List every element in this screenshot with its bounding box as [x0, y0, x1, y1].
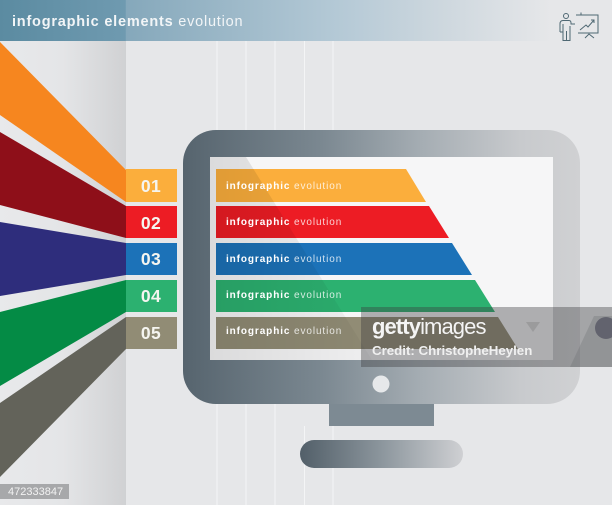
left side panel: [0, 41, 126, 505]
screen glare: [210, 157, 372, 360]
label 05: 05: [141, 323, 161, 343]
bar 4: [216, 280, 495, 312]
number labels: [126, 169, 177, 349]
bar 1: [216, 169, 426, 202]
caption 2: infographic evolution: [226, 217, 342, 228]
power button: [372, 376, 390, 392]
image id tag: [0, 484, 69, 499]
base: [300, 440, 463, 468]
caption 5: infographic evolution: [226, 326, 342, 337]
label 01: 01: [141, 176, 161, 196]
label 03: 03: [141, 249, 161, 269]
label 03: [126, 243, 177, 275]
icon: presenter with chart: [560, 12, 598, 40]
bar 5: [216, 317, 518, 349]
caption 1: infographic evolution: [226, 181, 342, 192]
label 05: [126, 317, 177, 349]
bar captions: [226, 181, 342, 337]
bar 3: [216, 243, 472, 275]
label 02: [126, 206, 177, 238]
ray: green: [0, 280, 126, 386]
caption 3: infographic evolution: [226, 254, 342, 265]
label 04: 04: [141, 286, 161, 306]
monitor frame: [183, 130, 580, 404]
vertical guide lines: [217, 41, 333, 505]
bar 2: [216, 206, 449, 238]
watermark logo: gettyimages: [372, 314, 486, 339]
ray: olive: [0, 317, 126, 477]
ray: navy: [0, 222, 126, 296]
ray: orange: [0, 42, 126, 202]
monitor stand: [329, 400, 434, 426]
watermark credit: Credit: ChristopheHeylen: [372, 343, 532, 358]
title: infographic elements evolution: [12, 14, 243, 30]
label 04: [126, 280, 177, 312]
monitor: [183, 130, 580, 468]
watermark: [361, 307, 612, 367]
pyramid bars: [216, 169, 518, 349]
label 02: 02: [141, 213, 161, 233]
caption 4: infographic evolution: [226, 290, 342, 301]
ray: dark red: [0, 132, 126, 238]
header band: [0, 0, 612, 41]
screen: [210, 157, 553, 360]
image id tag: 472333847: [8, 486, 63, 498]
label 01: [126, 169, 177, 202]
